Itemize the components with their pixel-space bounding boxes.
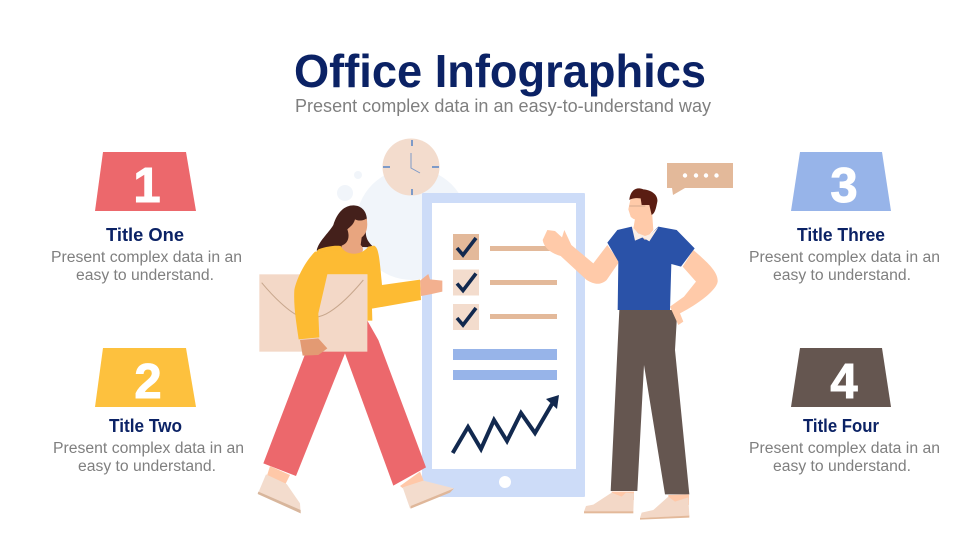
face xyxy=(628,197,651,220)
upper body xyxy=(259,205,442,356)
body text one xyxy=(51,249,242,284)
gesturing arm xyxy=(543,230,619,284)
panel: item two xyxy=(53,348,244,475)
checkboxes xyxy=(453,234,479,330)
illustration: phone with checklist xyxy=(422,193,585,497)
phone screen xyxy=(432,203,576,469)
collar xyxy=(632,226,658,241)
subtitle: Present complex data in an easy-to-understand way xyxy=(295,96,711,116)
envelope xyxy=(259,274,367,352)
shoes xyxy=(258,466,454,513)
body text three: easy to understand. xyxy=(773,267,911,284)
body text one: easy to understand. xyxy=(76,267,214,284)
body text three xyxy=(749,249,940,284)
sweater left arm xyxy=(294,250,343,339)
body text three: Present complex data in an xyxy=(749,249,940,266)
badge 2 xyxy=(95,348,196,409)
body text four xyxy=(749,440,940,475)
neck xyxy=(633,207,653,240)
speech bubble xyxy=(667,163,733,195)
phone body xyxy=(422,193,585,497)
icon: wall clock xyxy=(382,138,440,196)
hand on envelope xyxy=(300,338,327,356)
face and neck xyxy=(341,218,367,256)
body text two xyxy=(53,440,244,475)
blue bars xyxy=(453,349,557,380)
glasses xyxy=(629,205,645,207)
sweater torso and right arm xyxy=(300,246,421,321)
body text four: Present complex data in an xyxy=(749,440,940,457)
title: Office Infographics xyxy=(294,45,706,97)
badge 1 xyxy=(95,152,196,213)
panel: item three xyxy=(749,152,940,284)
arm and hand pointing xyxy=(420,274,442,296)
body text four: easy to understand. xyxy=(773,458,911,475)
shirt xyxy=(607,227,695,310)
shoes xyxy=(584,492,689,520)
badge 2: 2 xyxy=(134,355,162,409)
chart: rising zigzag arrow xyxy=(453,395,559,453)
hip arm xyxy=(670,250,718,325)
hair xyxy=(317,205,374,251)
heading: title two: Title Two xyxy=(109,416,182,436)
background blob and bubbles xyxy=(337,168,468,280)
body text one: Present complex data in an xyxy=(51,249,242,266)
heading: title three: Title Three xyxy=(797,225,885,245)
body text two: easy to understand. xyxy=(78,458,216,475)
checklist lines xyxy=(490,246,557,319)
legs xyxy=(263,320,426,486)
body text two: Present complex data in an xyxy=(53,440,244,457)
upper body xyxy=(543,188,718,325)
badge 4: 4 xyxy=(830,355,858,409)
badge 3 xyxy=(791,152,891,213)
badge 1: 1 xyxy=(133,159,161,213)
panel: item four xyxy=(749,348,940,475)
heading: title four: Title Four xyxy=(803,416,879,436)
illustration: woman with envelope xyxy=(258,205,454,513)
badge 4 xyxy=(791,348,891,409)
trousers xyxy=(611,310,689,494)
panel: item one xyxy=(51,152,242,284)
hair xyxy=(629,188,657,215)
phone button xyxy=(499,476,511,488)
badge 3: 3 xyxy=(830,159,858,213)
heading: title one: Title One xyxy=(106,225,184,245)
illustration: man gesturing xyxy=(543,188,718,520)
